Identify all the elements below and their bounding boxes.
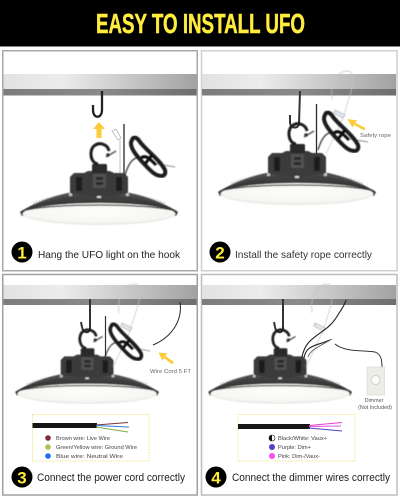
power cord coil	[318, 113, 368, 151]
ceiling hook	[274, 299, 283, 332]
dimmer label	[358, 398, 392, 411]
power cord coil	[125, 138, 175, 176]
arrow: safety rope	[348, 120, 365, 130]
legend: power wires	[32, 414, 149, 461]
support rod	[123, 124, 125, 176]
ceiling hook	[290, 91, 300, 128]
arrow: wire cord	[159, 353, 174, 364]
panel: step 2 safety rope	[202, 51, 397, 271]
panel: step 3 power cord	[3, 274, 197, 495]
badge 2	[210, 242, 230, 262]
legend: dimmer wires: Black/White: Vaux+	[278, 436, 327, 442]
safety rope loop	[113, 284, 140, 367]
legend: power wires: Green/Yellow wire: Ground Wire	[56, 445, 137, 451]
safety rope loop	[306, 284, 333, 367]
UFO light	[15, 330, 159, 404]
UFO light	[218, 124, 376, 205]
ceiling hook	[81, 299, 90, 332]
legend: dimmer wires	[238, 414, 355, 461]
badge 4	[206, 466, 226, 488]
caption 3: Connect the power cord correctly	[37, 472, 186, 484]
panel: step 1 hang the light	[3, 51, 197, 271]
badge 3	[12, 466, 32, 488]
ceiling hook	[93, 91, 102, 117]
caption 2: Install the safety rope correctly	[235, 250, 373, 261]
support rod	[316, 104, 318, 156]
safety clip	[112, 129, 121, 176]
legend: dimmer wires: Purple: Dim+	[278, 445, 311, 451]
title: EASY TO INSTALL UFO	[96, 8, 305, 39]
header banner	[0, 0, 400, 46]
support rod	[104, 316, 106, 356]
panel: step 4 dimmer wires	[202, 274, 397, 495]
wire cord	[153, 302, 180, 345]
caption 1: Hang the UFO light on the hook	[38, 250, 181, 261]
caption 4: Connect the dimmer wires correctly	[232, 472, 391, 484]
wire cord label: Wire Cord 5 FT	[150, 369, 192, 375]
badge 3: 3	[17, 468, 27, 488]
dimmer label: (Not Included)	[358, 405, 392, 411]
safety rope label: Safety rope	[360, 133, 391, 139]
legend: dimmer wires: Pink: Dim-/Vaux-	[278, 454, 320, 460]
safety rope loop	[326, 71, 353, 154]
arrow: up	[93, 122, 105, 138]
badge 1: 1	[17, 244, 27, 262]
power wires	[302, 300, 346, 358]
dimmer wires	[308, 339, 332, 357]
badge 2: 2	[215, 244, 225, 262]
legend: power wires: Blue wire: Neutral Wire	[56, 454, 123, 460]
UFO light	[208, 330, 352, 404]
power cord coil	[105, 324, 150, 359]
dimmer label: Dimmer	[365, 398, 384, 404]
badge 4: 4	[211, 468, 221, 488]
legend: power wires: Brown wire: Live Wire	[56, 436, 110, 442]
dimmer switch	[367, 367, 384, 395]
UFO light	[20, 144, 178, 225]
badge 1	[12, 242, 32, 262]
